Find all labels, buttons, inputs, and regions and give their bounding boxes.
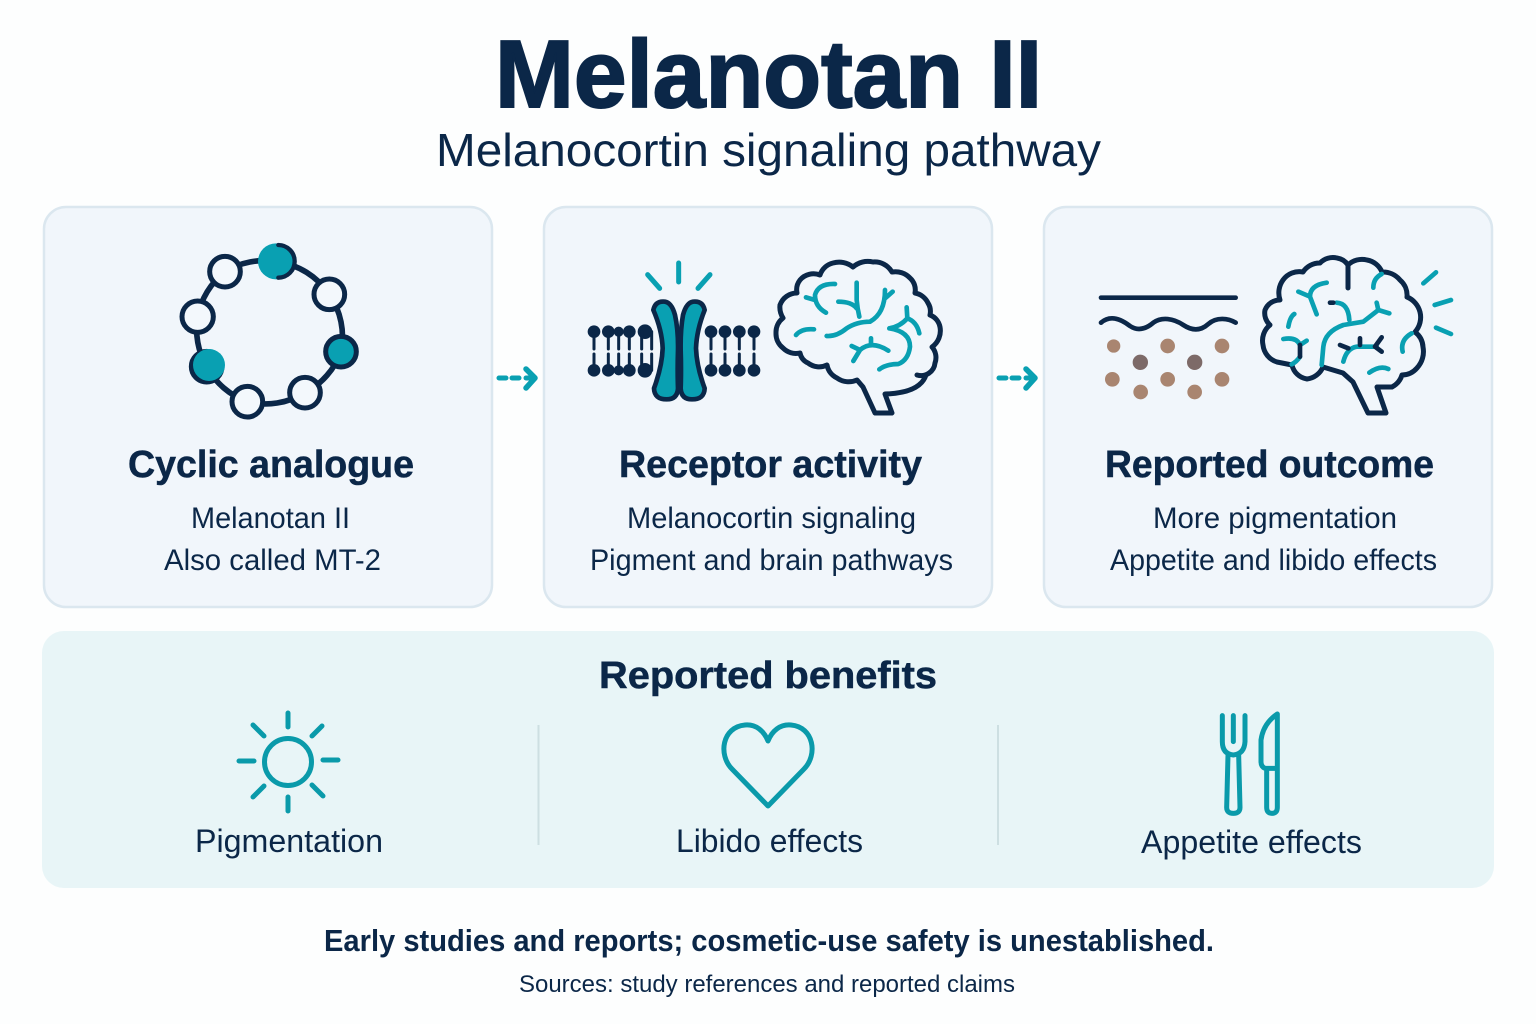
- label: Pigmentation: [195, 823, 383, 859]
- body text: Melanotan II: [191, 502, 350, 535]
- icon: brain with signal: [1263, 258, 1451, 413]
- caveat statement: Early studies and reports; cosmetic-use safety is unestablished.: [324, 923, 1214, 958]
- body text: Also called MT-2: [164, 544, 381, 577]
- body text: Appetite and libido effects: [1110, 544, 1437, 577]
- title: Melanotan II: [495, 21, 1042, 128]
- body text: Pigment and brain pathways: [590, 544, 953, 577]
- icon: fork and knife: [1222, 714, 1277, 813]
- arrow: receptor activity to reported outcome: [999, 369, 1035, 388]
- heading: Cyclic analogue: [128, 444, 414, 486]
- benefit: libido effects: [676, 725, 863, 859]
- body text: Melanocortin signaling: [627, 502, 916, 535]
- icon: membrane receptor: [588, 263, 760, 399]
- body text: [164, 502, 381, 577]
- panel: receptor activity: [544, 207, 992, 607]
- panel: reported benefits: [42, 631, 1494, 888]
- subtitle: Melanocortin signaling pathway: [436, 124, 1101, 176]
- body text: [1110, 502, 1437, 577]
- benefit: pigmentation: [195, 713, 383, 859]
- icon: heart: [724, 725, 812, 806]
- icon: brain: [776, 261, 940, 413]
- label: Appetite effects: [1141, 824, 1362, 860]
- icon: skin with pigment: [1101, 298, 1236, 399]
- heading: Receptor activity: [619, 444, 922, 486]
- sources: Sources: study references and reported claims: [519, 971, 1015, 998]
- benefit: appetite effects: [1141, 714, 1362, 860]
- panel: reported outcome: [1044, 207, 1492, 607]
- heading: Reported benefits: [599, 655, 937, 697]
- label: Libido effects: [676, 823, 863, 859]
- panel: cyclic analogue: [44, 207, 492, 607]
- arrow: cyclic analogue to receptor activity: [499, 369, 535, 388]
- body text: More pigmentation: [1153, 502, 1397, 535]
- heading: Reported outcome: [1105, 444, 1434, 486]
- icon: cyclic peptide ring: [182, 243, 356, 417]
- body text: [590, 502, 953, 577]
- icon: sun: [239, 713, 338, 811]
